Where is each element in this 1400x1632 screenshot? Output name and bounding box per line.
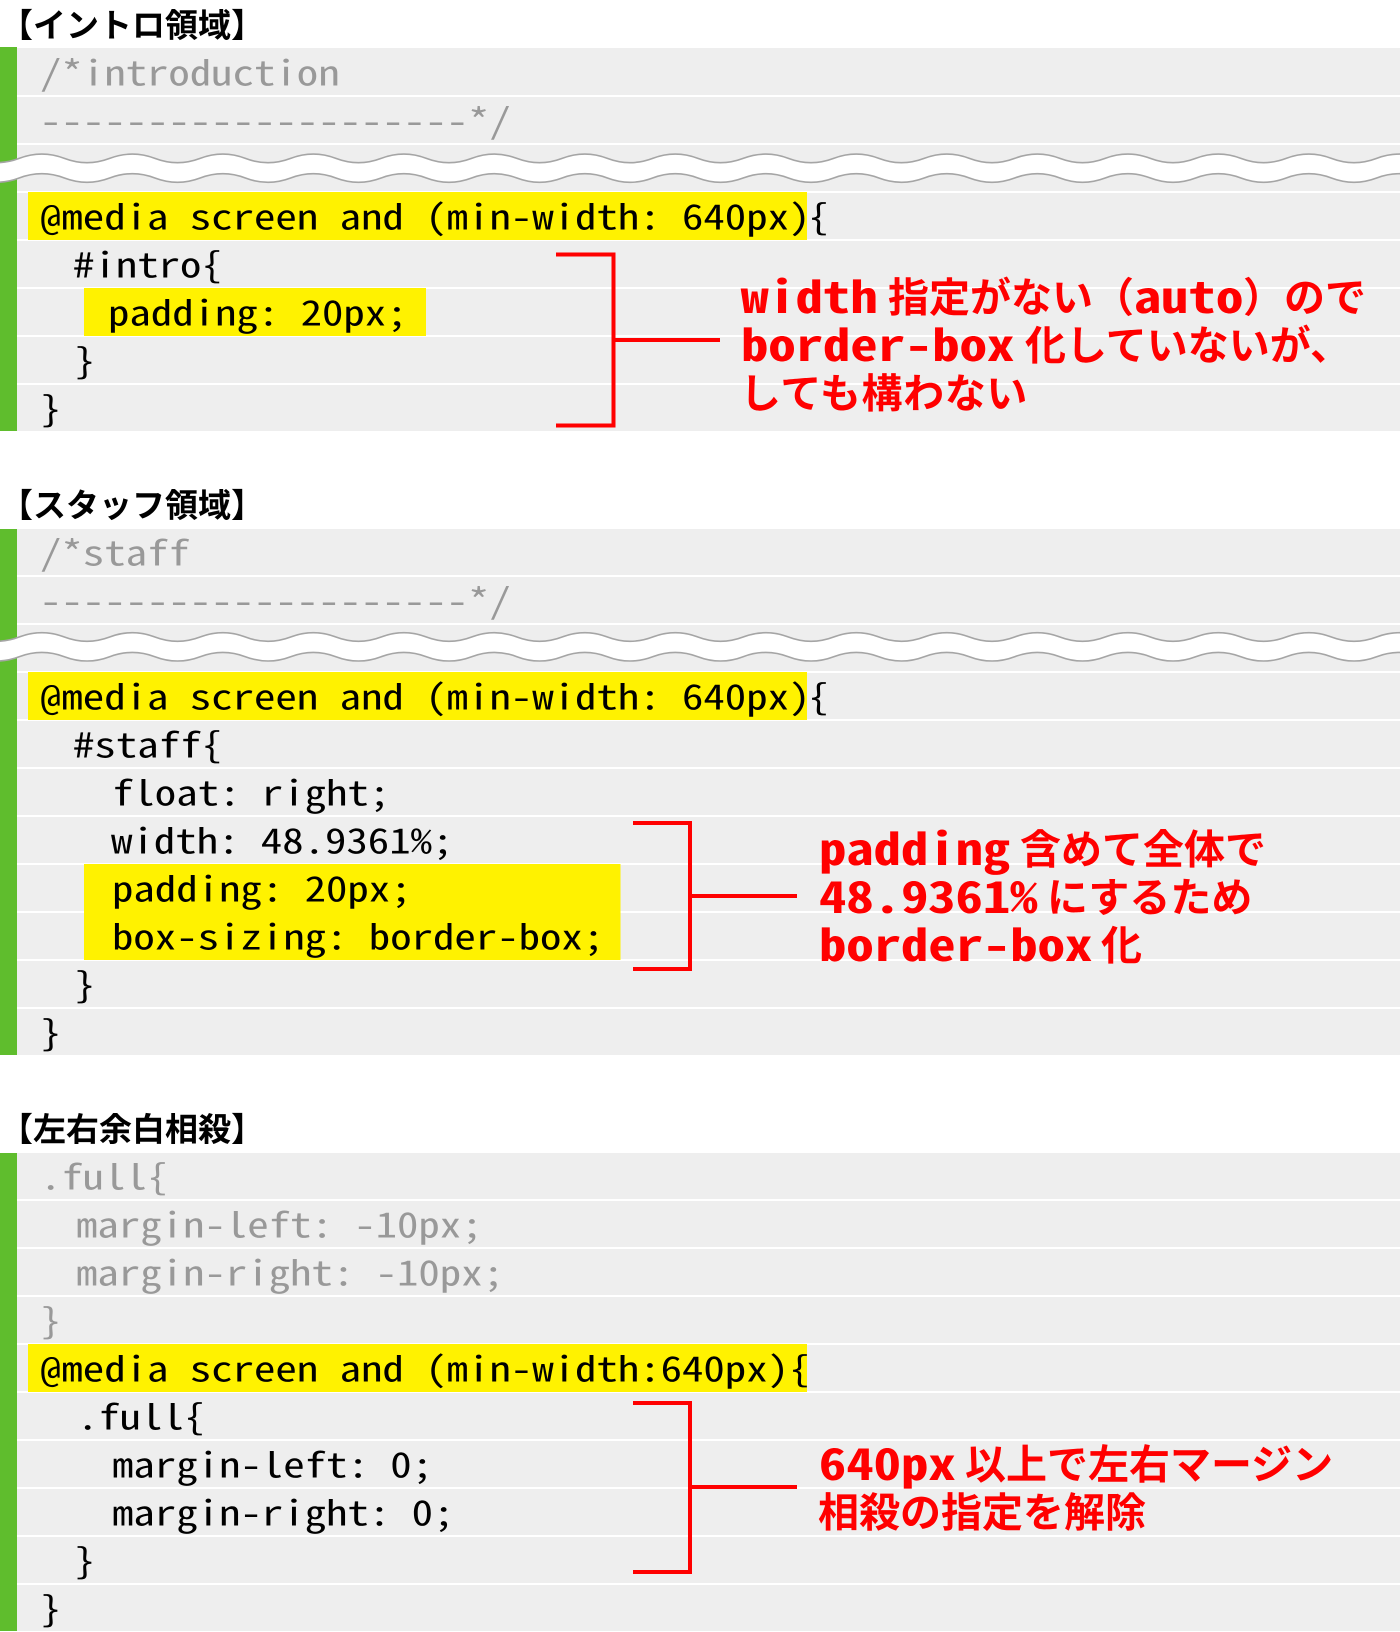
highlight: padding [84,288,426,336]
panel: margin offset section [0,1111,1400,1632]
bracket [556,254,720,426]
panel: staff section [0,487,1400,1056]
code lines [40,1342,810,1632]
callout: intro note: auto [1134,263,1243,326]
comment code lines: .full{ [40,1150,168,1200]
code lines: margin-left: 0; [112,1438,433,1488]
code block background [0,1153,1400,1631]
callout: staff note: 48.9361% [819,863,1038,926]
comment code lines: margin-right: -10px; [76,1246,504,1296]
callout: intro note: しても構わない [740,360,1028,420]
callout: staff note: 含めて全体で [1020,816,1266,876]
heading: staff: 【スタッフ領域】 [0,487,264,524]
callout: margin note: 相殺の指定を解除 [818,1479,1146,1539]
code lines: float: right; [112,766,390,816]
comment code lines [40,46,511,144]
highlight: media query [28,192,807,240]
callout: intro note: width [740,263,878,326]
code lines: { [808,670,829,720]
callout: margin note: 以上で左右マージン [965,1431,1333,1491]
panel: intro section [0,7,1400,432]
callout: staff note: border-box [819,911,1093,974]
comment code lines: --------------------*/ [40,574,511,624]
code lines: } [74,334,95,384]
code lines: } [74,958,95,1008]
comment code lines: /*staff [40,526,190,576]
comment code lines: /*introduction [40,46,340,96]
callout: staff note: 化 [1101,912,1142,972]
code lines [40,670,829,1056]
bracket [633,1403,797,1572]
comment code lines: } [40,1294,61,1344]
callout: intro note: 化していないが、 [1025,312,1351,372]
callout: margin note [818,1430,1333,1539]
comment code lines [40,1150,504,1344]
code lines: } [40,1582,61,1632]
code lines: #staff{ [73,718,223,768]
code lines: } [74,1534,95,1584]
code lines: margin-right: 0; [112,1486,454,1536]
code block background [0,47,1400,431]
code lines: @media screen and (min-width: 640px) [40,670,810,720]
code lines: } [40,382,61,432]
code lines: @media screen and (min-width:640px){ [40,1342,810,1392]
comment code lines [40,526,511,624]
callout: intro note: ）ので [1243,264,1366,324]
callout: intro note [740,263,1366,420]
callout: margin note: 640px [819,1430,956,1493]
heading: intro: 【イントロ領域】 [0,7,264,44]
callout: intro note: border-box [741,311,1015,374]
comment code lines: margin-left: -10px; [76,1198,483,1248]
code lines: padding: 20px; [112,862,412,912]
wavy break [0,154,1400,182]
code lines: } [40,1006,61,1056]
code lines [40,190,829,432]
bracket [633,823,797,969]
callout: intro note: 指定がない（ [888,264,1134,324]
code lines: #intro{ [73,238,223,288]
heading: margin offset: 【左右余白相殺】 [0,1111,264,1148]
code lines: .full{ [77,1390,205,1440]
callout: staff note: にするため [1047,864,1252,924]
callout: staff note [819,815,1266,974]
wavy break [0,633,1400,661]
code lines: padding: 20px; [108,286,408,336]
highlight: padding and box-sizing [84,864,620,960]
highlight: media query [28,1344,807,1392]
code lines: box-sizing: border-box; [112,910,604,960]
code block background [0,529,1400,1055]
code lines: { [808,190,829,240]
code lines: width: 48.9361%; [111,814,453,864]
highlight: media query [28,672,807,720]
comment code lines: --------------------*/ [40,94,511,144]
code lines: @media screen and (min-width: 640px) [40,190,810,240]
callout: staff note: padding [819,815,1010,878]
